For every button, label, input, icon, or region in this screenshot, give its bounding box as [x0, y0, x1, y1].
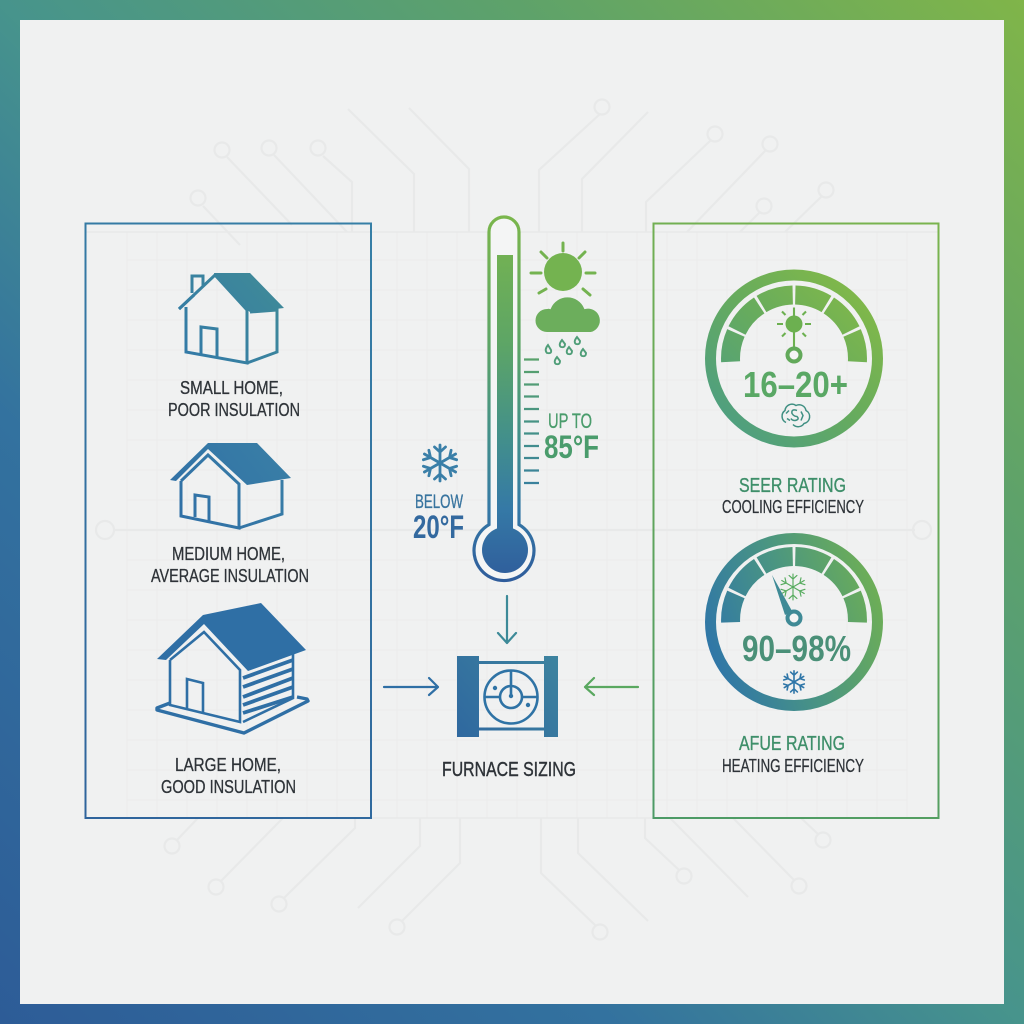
panel: home types	[86, 224, 371, 818]
icon: furnace	[457, 656, 558, 737]
thermometer scale ticks	[524, 360, 539, 483]
label: small home: SMALL HOME,	[180, 377, 283, 398]
arrow: left	[585, 678, 638, 695]
arrow: down	[498, 596, 516, 643]
label: AFUE: HEATING EFFICIENCY	[722, 756, 864, 776]
label: medium home: MEDIUM HOME,	[172, 543, 285, 564]
thermometer	[474, 217, 534, 581]
label: small home	[168, 377, 300, 420]
label: up to 85F	[544, 410, 599, 465]
label: below 20F: 20°F	[413, 509, 464, 545]
label: AFUE: AFUE RATING	[739, 732, 845, 755]
icon: blue snowflake in gauge	[783, 671, 805, 693]
icon: sun and rain cloud	[531, 243, 601, 364]
label: SEER: COOLING EFFICIENCY	[722, 497, 864, 517]
label: SEER: SEER RATING	[739, 474, 846, 497]
label: AFUE	[722, 732, 864, 776]
icon: money cloud	[782, 404, 810, 427]
label: large home	[161, 754, 296, 797]
icon: large house	[157, 603, 308, 733]
icon: blue snowflake	[422, 445, 458, 481]
label: below 20F: BELOW	[415, 492, 463, 513]
label: furnace sizing: FURNACE SIZING	[442, 759, 576, 781]
gauge: AFUE	[710, 538, 878, 706]
label: up to 85F: UP TO	[548, 410, 592, 433]
cloud	[534, 296, 601, 333]
label: medium home: AVERAGE INSULATION	[151, 565, 309, 586]
icon: green snowflake in gauge	[780, 574, 806, 600]
gauge: SEER	[710, 275, 878, 442]
needle	[772, 575, 792, 615]
label: large home: LARGE HOME,	[175, 754, 281, 775]
icon: sun in gauge	[777, 308, 811, 350]
label: below 20F	[413, 492, 464, 545]
circuit background pattern	[85, 100, 938, 940]
label: small home: POOR INSULATION	[168, 399, 300, 420]
label: SEER	[722, 474, 864, 517]
label: up to 85F: 85°F	[544, 429, 599, 465]
icon: medium house	[170, 443, 291, 528]
icon: small house	[179, 273, 284, 363]
label: large home: GOOD INSULATION	[161, 776, 296, 797]
panel: efficiency ratings	[654, 224, 938, 818]
arrow: right	[384, 678, 438, 695]
gauge value: 16–20+	[743, 364, 848, 405]
label: medium home	[151, 543, 309, 586]
gauge value: 90–98%	[742, 628, 851, 669]
